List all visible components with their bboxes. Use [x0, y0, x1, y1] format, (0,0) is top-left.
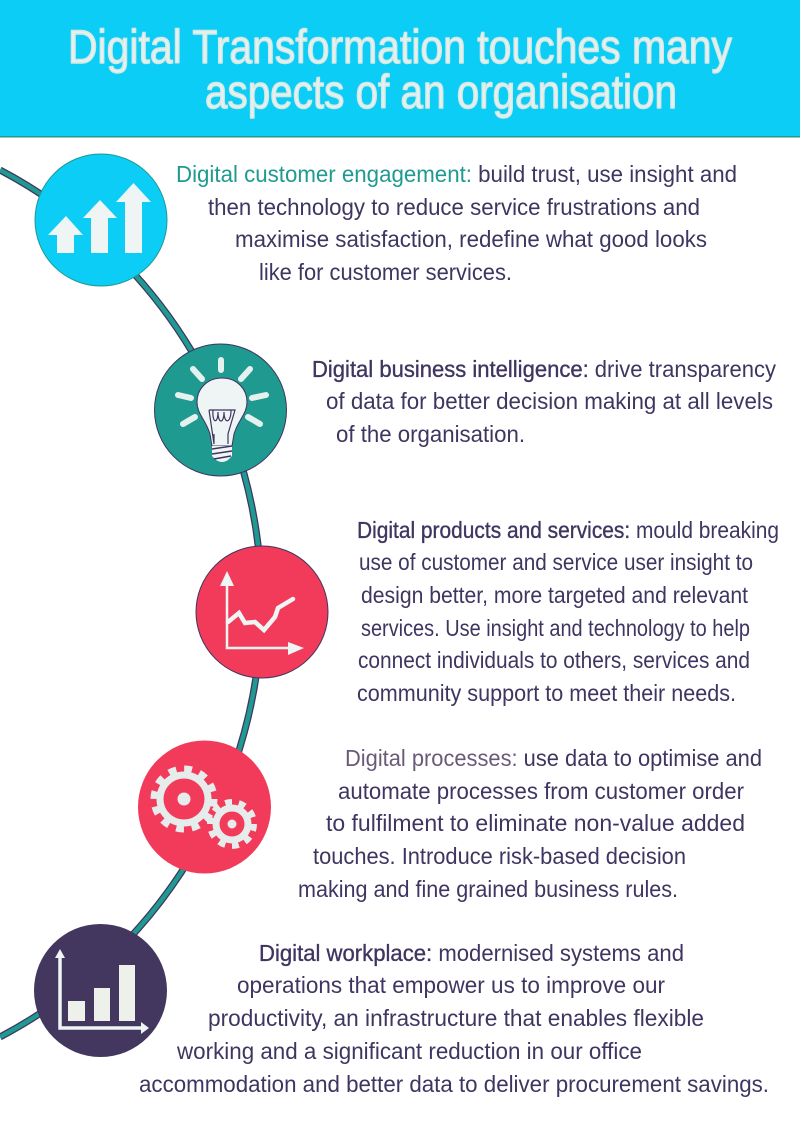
text: products and services: Digital products and services: mould breaking [357, 517, 779, 543]
text: processes: automate processes from customer order [338, 778, 744, 804]
text: workplace: Digital workplace: modernised systems and [259, 940, 684, 966]
text: workplace: productivity, an infrastructure that enables flexible [208, 1005, 704, 1031]
text: products and services [357, 517, 779, 706]
text: processes [298, 745, 762, 902]
panel: customer engagement [35, 154, 737, 286]
text: products and services: services. Use insight and technology to help [361, 615, 750, 641]
title [68, 20, 732, 118]
text: products and services: connect individuals to others, services and [358, 647, 750, 673]
icon: bar chart [34, 924, 167, 1057]
text: customer engagement: then technology to reduce service frustrations and [208, 194, 700, 220]
icon: line chart [196, 546, 328, 678]
text: customer engagement: like for customer services. [259, 259, 512, 285]
text: workplace: accommodation and better data to deliver procurement savings. [139, 1071, 769, 1097]
panel: products and services [196, 517, 779, 706]
icon: gears [138, 740, 271, 874]
text: processes: making and fine grained business rules. [298, 876, 678, 902]
text: business intelligence: of the organisation. [336, 421, 525, 447]
text: business intelligence [312, 356, 776, 447]
text: products and services: use of customer and service user insight to [359, 549, 753, 575]
panel: business intelligence [154, 344, 776, 476]
text: customer engagement: Digital customer engagement: build trust, use insight and [176, 161, 737, 187]
panel: workplace [34, 924, 769, 1097]
text: workplace [139, 940, 769, 1097]
text: workplace: operations that empower us to improve our [237, 972, 665, 998]
text: business intelligence: of data for better decision making at all levels [326, 388, 773, 414]
icon: rising arrows [35, 154, 167, 286]
text: processes: to fulfilment to eliminate non-value added [326, 810, 745, 836]
text: products and services: community support to meet their needs. [357, 680, 736, 706]
header banner [0, 0, 800, 138]
text: business intelligence: Digital business intelligence: drive transparency [312, 356, 776, 382]
text: workplace: working and a significant reduction in our office [176, 1038, 642, 1064]
text: processes: Digital processes: use data to optimise and [345, 745, 762, 771]
icon: light bulb [154, 344, 286, 476]
panel: processes [138, 740, 762, 902]
text: customer engagement [176, 161, 737, 285]
connecting curve [0, 170, 262, 1037]
text: products and services: design better, more targeted and relevant [361, 582, 749, 608]
title: aspects of an organisation [205, 65, 677, 118]
text: customer engagement: maximise satisfaction, redefine what good looks [235, 226, 707, 252]
text: processes: touches. Introduce risk-based decision [313, 843, 686, 869]
